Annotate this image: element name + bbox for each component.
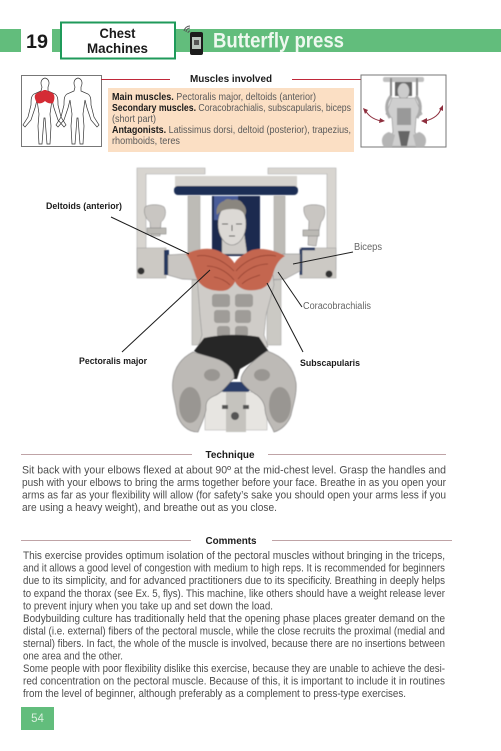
technique heading: Technique (206, 450, 255, 461)
shorts (194, 335, 269, 379)
highlighted pectoral muscles (186, 249, 285, 291)
comments text: to prevent injury when you take up and set down the load. (23, 600, 273, 612)
panel: muscles involved: Main muscles. Pectoralis major, deltoids (anterior) (112, 92, 316, 103)
panel: muscles involved (108, 88, 354, 152)
label: deltoids: Deltoids (anterior) (46, 201, 122, 212)
comments text: to expand the thorax (see Ex. 5, flys). This machine, like others should have a weight release lever (23, 588, 445, 600)
comments text: one area and the other. (23, 650, 123, 662)
label: subscapularis: Subscapularis (300, 358, 360, 369)
panel: muscles involved: (short part) (112, 114, 156, 125)
icon: body map front and back (22, 76, 102, 146)
technique text: arms as far as your flexibility will allow (for safety’s sake you should open your arms less if you (22, 490, 446, 502)
comments text: red concentration on the pectoral muscle. Because of this, it is important to include it in routines (23, 676, 446, 688)
label: coracobrachialis: Coracobrachialis (303, 301, 371, 312)
comments text: Bodybuilding culture has traditionally held that the opening phase places greater demand on the (23, 613, 445, 625)
panel: muscles involved: Antagonists. Latissimus dorsi, deltoid (posterior), trapezius, (112, 125, 351, 136)
page number: 54 (31, 713, 44, 725)
title: Butterfly press (213, 30, 344, 52)
comments text: sternal) fibers. In fact, the whole of the muscle is involved, because there are no insertions between (23, 638, 445, 650)
label leader lines (111, 217, 353, 352)
machine frame (137, 168, 336, 345)
category box (61, 22, 175, 58)
category box: Machines (87, 41, 148, 56)
torso (197, 275, 274, 347)
technique text (22, 464, 446, 514)
comments text: Some people with poor flexibility dislike this exercise, because they are unable to achieve the desi- (23, 663, 445, 675)
thighs (173, 351, 296, 432)
header band (0, 29, 501, 52)
technique text: push with your elbows to bring the arms together before your face. Breathe in as you open your (22, 477, 446, 489)
abs (212, 294, 253, 337)
comments text: due to its simplicity, and for advanced practitioners due to its specificity. Breathing in deeply helps (23, 575, 446, 587)
panel: muscles involved: Secondary muscles. Coracobrachialis, subscapularis, biceps (112, 103, 351, 114)
comments text: This exercise provides optimum isolation of the pectoral muscles without bringing in the triceps, (23, 550, 445, 562)
comments heading: Comments (206, 536, 257, 547)
head (217, 199, 247, 254)
technique text: are using a heavy weight), and breathe out as you close. (22, 502, 277, 514)
comments text (23, 550, 446, 700)
main illustration: chest machine with muscles (137, 168, 336, 432)
icon: phone with signal (184, 26, 203, 55)
machine base (205, 392, 267, 432)
comments text: from the level of beginner, although preferably as a complement to press-type exercises. (23, 688, 406, 700)
comments text: and it allows a good level of congestion with medium to high reps. It is recommended for beginners (23, 562, 446, 574)
comments text: distal (i.e. external) fibers of the pectoral muscle, while the close recruits the proximal (medial and (23, 626, 445, 638)
seat (221, 382, 250, 392)
technique text: Sit back with your elbows flexed at about 90º at the mid-chest level. Grasp the handles and (22, 464, 446, 476)
page number (21, 707, 54, 730)
panel: muscles involved: rhomboids, teres (112, 136, 180, 147)
label: pectoralis major: Pectoralis major (79, 356, 147, 367)
fists and forearms (144, 205, 325, 280)
icon: machine movement thumbnail (361, 75, 446, 147)
muscles involved heading: Muscles involved (190, 74, 272, 85)
label: biceps: Biceps (354, 242, 382, 253)
exercise number: 19 (26, 31, 48, 53)
category box: Chest (100, 26, 136, 41)
